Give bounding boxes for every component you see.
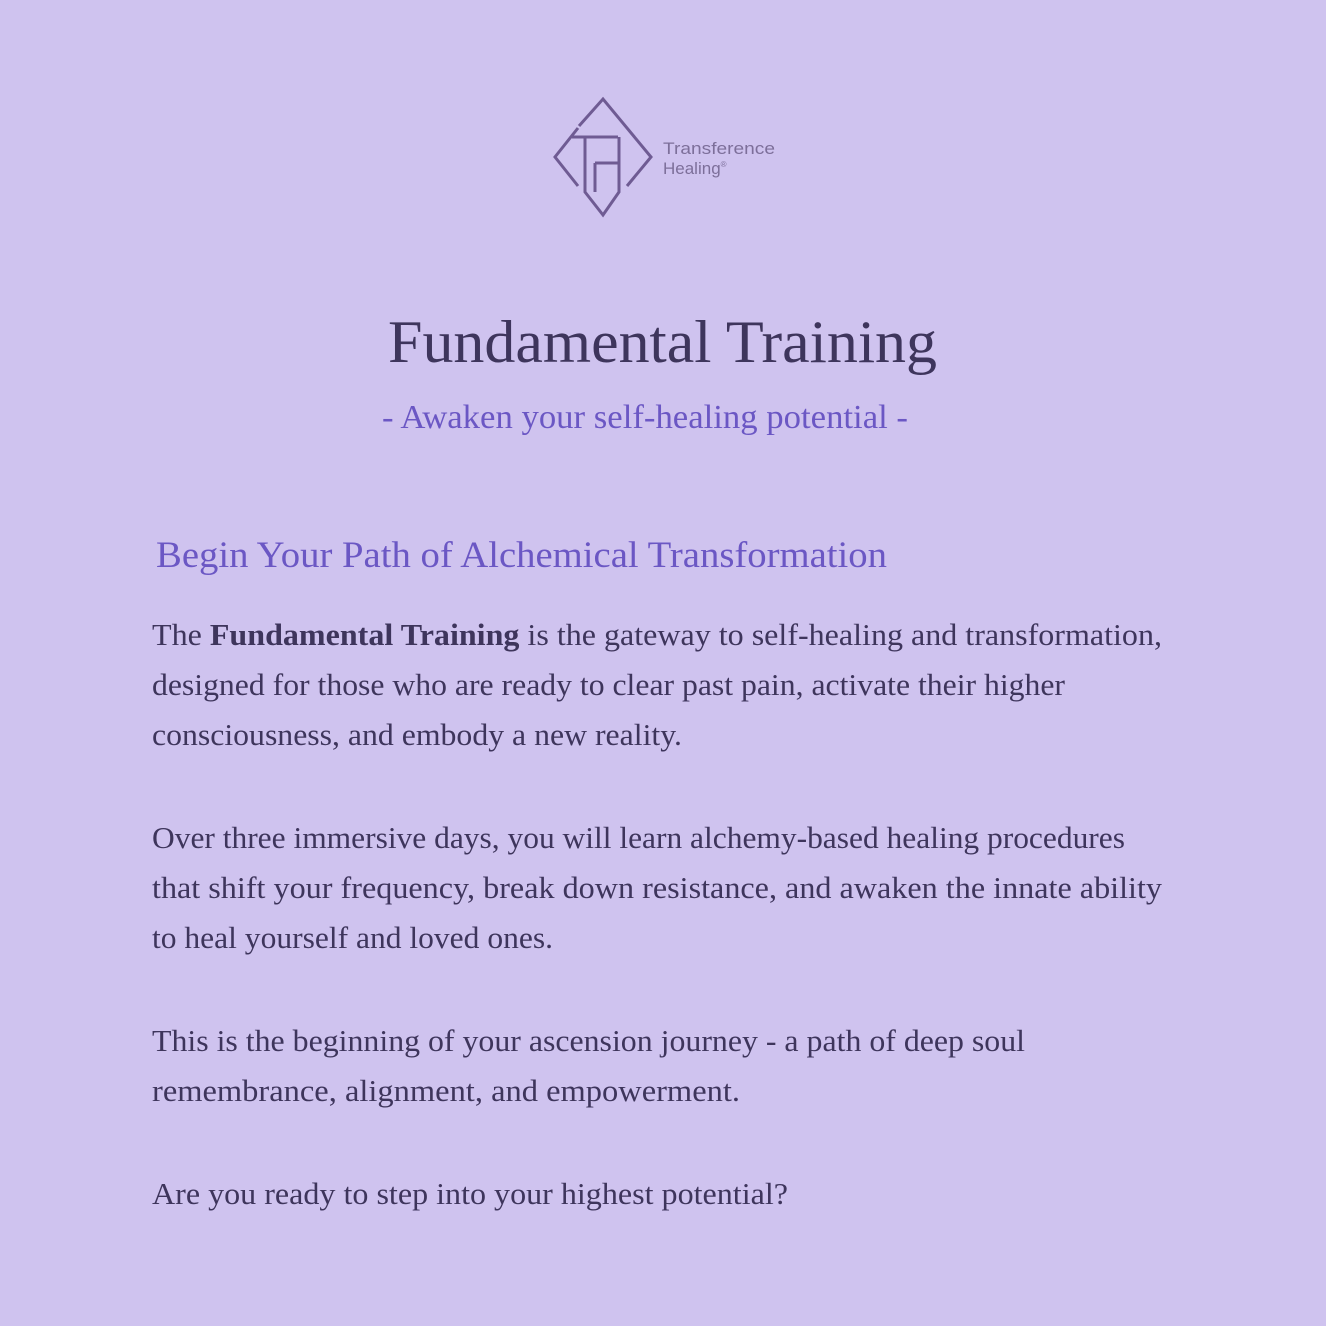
closing question: Are you ready to step into your highest potential?	[152, 1176, 788, 1211]
paragraph 2	[152, 820, 1163, 955]
logo text: Transference	[663, 139, 775, 158]
paragraph 2: to heal yourself and loved ones.	[152, 920, 553, 955]
section heading: Begin Your Path of Alchemical Transformation	[156, 535, 887, 576]
paragraph 3: This is the beginning of your ascension journey - a path of deep soul	[152, 1023, 1025, 1058]
logo	[555, 99, 775, 215]
logo text: Healing	[663, 159, 721, 178]
paragraph 1: designed for those who are ready to clear past pain, activate their higher	[152, 667, 1066, 702]
paragraph 2: that shift your frequency, break down resistance, and awaken the innate ability	[152, 870, 1163, 905]
paragraph 1	[152, 617, 1162, 752]
paragraph 3: remembrance, alignment, and empowerment.	[152, 1073, 740, 1108]
logo text	[663, 139, 775, 178]
title: Fundamental Training	[388, 309, 937, 375]
paragraph 3	[152, 1023, 1025, 1108]
logo text: ®	[721, 160, 727, 169]
paragraph 1: consciousness, and embody a new reality.	[152, 717, 682, 752]
icon: TH diamond	[555, 99, 651, 215]
paragraph 1: The Fundamental Training is the gateway to self-healing and transformation,	[152, 617, 1162, 652]
subtitle: - Awaken your self-healing potential -	[382, 399, 908, 436]
paragraph 2: Over three immersive days, you will learn alchemy-based healing procedures	[152, 820, 1125, 855]
body text	[152, 617, 1163, 1211]
